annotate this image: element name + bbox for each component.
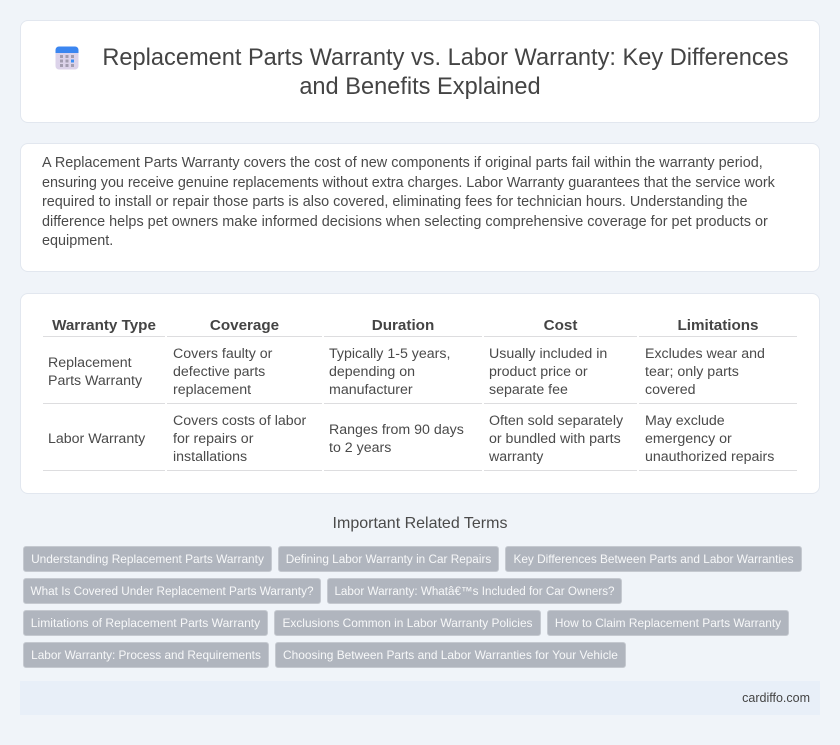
tag: Exclusions Common in Labor Warranty Policies — [282, 616, 533, 630]
row 2: Labor Warranty: Labor Warranty — [48, 430, 145, 446]
header: Cost: Cost — [544, 317, 577, 334]
row 1: coverage: Covers faulty or — [173, 346, 272, 362]
tag: Key Differences Between Parts and Labor Warranties — [513, 552, 794, 566]
row 1: Replacement Parts Warranty: Parts Warranty — [48, 372, 142, 388]
tag — [547, 610, 789, 636]
tag: Labor Warranty: Whatâ€™s Included for Car Owners? — [334, 585, 615, 598]
footer: site name: cardiffo.com — [742, 691, 810, 705]
tag: Labor Warranty: Process and Requirements — [31, 648, 261, 662]
row 2: limitations: May exclude — [645, 412, 725, 428]
tag — [23, 642, 269, 668]
row 2: duration: Ranges from 90 days — [329, 422, 464, 438]
row 1: coverage: replacement — [173, 382, 251, 398]
tag — [278, 546, 499, 572]
row 2: limitations: unauthorized repairs — [645, 448, 774, 464]
header: Coverage: Coverage — [210, 317, 279, 334]
row 2: cost: warranty — [489, 448, 543, 464]
row 2: coverage: Covers costs of labor — [173, 412, 306, 428]
footer bar — [20, 681, 820, 715]
row 1: cost: separate fee — [489, 382, 568, 398]
row 1: limitations: Excludes wear and — [645, 346, 765, 362]
title: Replacement Parts Warranty vs. Labor Warranty: Key Differences — [102, 45, 789, 71]
row 1: Replacement Parts Warranty — [48, 354, 142, 388]
tag: Understanding Replacement Parts Warranty — [31, 552, 264, 566]
title: and Benefits Explained — [299, 74, 541, 100]
row 2: cost — [489, 412, 623, 464]
tag — [275, 642, 626, 668]
panel: comparison table — [20, 293, 820, 494]
header: Duration: Duration — [372, 317, 434, 334]
row 1: coverage: defective parts — [173, 364, 265, 380]
header: Limitations: Limitations — [677, 317, 758, 334]
row 1: limitations — [645, 346, 765, 398]
row 1: duration — [329, 346, 450, 398]
row 1: cost: product price or — [489, 364, 588, 380]
row 2: cost: or bundled with parts — [489, 430, 621, 446]
row 1: limitations: covered — [645, 382, 695, 398]
panel: header — [20, 20, 820, 123]
summary paragraph — [42, 155, 775, 249]
row 1: Replacement Parts Warranty: Replacement — [48, 354, 132, 370]
summary paragraph: required to install or repair those parts is also covered, eliminating fees for technician hours. Understanding the — [42, 194, 748, 210]
row 1: duration: manufacturer — [329, 382, 413, 398]
summary paragraph: difference helps pet owners make informed decisions when selecting comprehensive coverage for pet products or — [42, 214, 768, 230]
summary paragraph: equipment. — [42, 233, 113, 249]
tag: How to Claim Replacement Parts Warranty — [555, 616, 781, 630]
icon: calendar — [56, 46, 78, 70]
row 2: coverage: installations — [173, 448, 247, 464]
row 1: coverage — [173, 346, 272, 398]
tag: Choosing Between Parts and Labor Warranties for Your Vehicle — [283, 648, 618, 662]
tag — [327, 578, 622, 604]
tag: What Is Covered Under Replacement Parts Warranty? — [30, 585, 313, 598]
row 2: coverage — [173, 412, 306, 464]
summary paragraph: ensuring you receive genuine replacements without extra charges. Labor Warranty guarantees that the service work — [42, 174, 775, 190]
row 2: cost: Often sold separately — [489, 412, 623, 428]
row 2: duration — [329, 422, 464, 456]
title — [102, 45, 789, 100]
summary paragraph: A Replacement Parts Warranty covers the cost of new components if original parts fail within the warranty period, — [42, 155, 763, 171]
row 1: cost: Usually included in — [489, 346, 607, 362]
row 2: limitations: emergency or — [645, 430, 732, 446]
row 1: duration: depending on — [329, 364, 415, 380]
header: Warranty Type: Warranty Type — [52, 317, 156, 334]
row 1: duration: Typically 1-5 years, — [329, 346, 450, 362]
tag — [274, 610, 541, 636]
panel: summary text — [20, 143, 820, 272]
tag: Limitations of Replacement Parts Warranty — [31, 616, 260, 630]
tag — [505, 546, 802, 572]
row 1: limitations: tear; only parts — [645, 364, 739, 380]
tag — [23, 546, 272, 572]
tag — [23, 578, 321, 604]
heading: Important Related Terms: Important Related Terms — [333, 515, 507, 532]
tag: Defining Labor Warranty in Car Repairs — [286, 553, 491, 566]
tag — [23, 610, 268, 636]
row 2: duration: to 2 years — [329, 440, 391, 456]
row 1: cost — [489, 346, 607, 398]
row 2: coverage: for repairs or — [173, 430, 253, 446]
row 2: limitations — [645, 412, 774, 464]
